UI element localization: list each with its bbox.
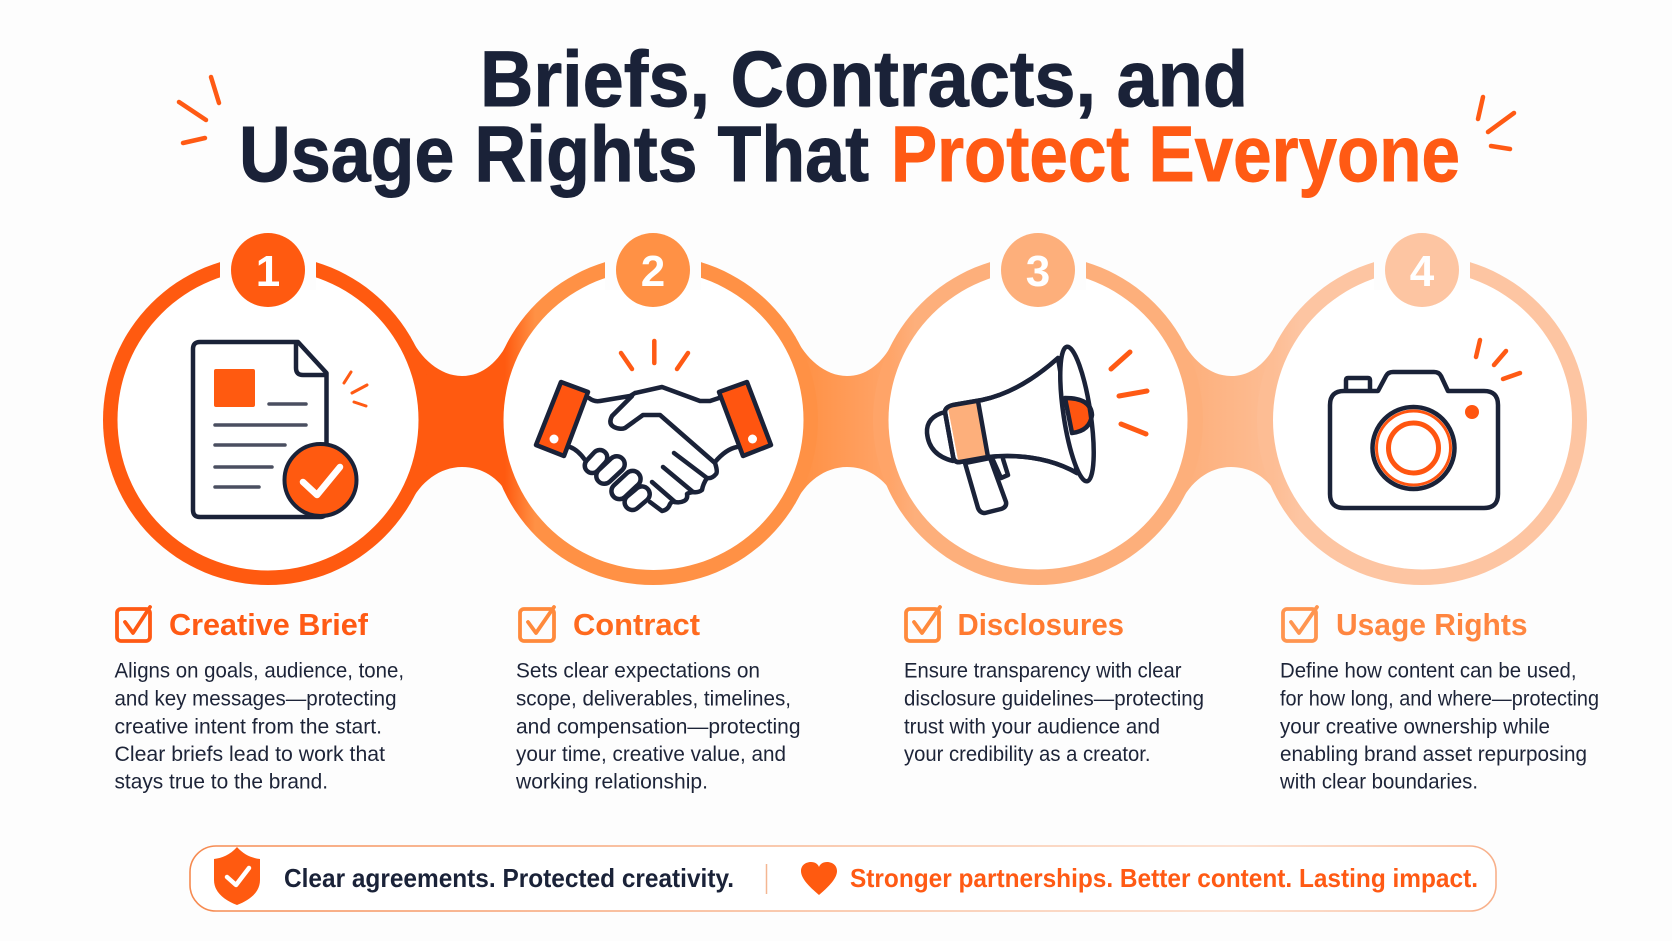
text block: creative brief: Aligns on goals, audience, tone, [114,660,404,682]
text block: disclosures: Ensure transparency with clear [904,660,1182,682]
number badge 1: 1 [256,247,280,296]
text: clear agreements: Clear agreements. Protected creativity. [284,863,734,893]
text block: creative brief: stays true to the brand. [114,770,328,794]
text block: creative brief: creative intent from the start. [114,716,382,738]
icon: megaphone [927,345,1147,513]
panel: step 3 disclosures [873,233,1204,766]
text block: creative brief: and key messages—protecting [114,688,396,710]
ring 4 [1257,240,1587,585]
ring 2 [488,240,818,585]
icon: heart [801,862,837,895]
text block: contract: Sets clear expectations on [516,660,760,682]
text block: contract: and compensation—protecting [516,716,800,738]
number badge 4: 4 [1410,247,1435,296]
text block: contract: scope, deliverables, timelines, [516,688,791,710]
text block: usage rights [1279,660,1599,794]
heading: usage rights: Usage Rights [1336,607,1528,642]
title: Briefs, Contracts, and [480,34,1248,123]
title [239,34,1460,198]
ring 3 [873,240,1203,585]
text block: contract [515,660,800,794]
number badge 2 [616,233,690,307]
heading: creative brief: Creative Brief [169,607,369,642]
number badge 1 [231,233,305,307]
text block: usage rights: enabling brand asset repurposing [1280,743,1587,766]
icon: shield [214,847,260,905]
icon: left title sparks [179,77,219,143]
title: Usage Rights That [239,109,869,198]
icon: handshake [536,341,771,513]
callout: bottom banner [190,846,1496,911]
text block: contract: working relationship. [515,770,708,794]
text block: contract: your time, creative value, and [516,743,786,766]
number badge 3: 3 [1026,247,1050,296]
icon: document with check [193,342,367,517]
text block: disclosures: your credibility as a creator. [904,743,1150,766]
connectors between circles [410,336,1281,504]
divider [766,864,768,894]
panel: step 4 usage rights [1257,233,1599,794]
text block: creative brief: Clear briefs lead to work that [114,743,385,766]
number badge 4 [1385,233,1459,307]
panel: step 1 creative brief [103,233,433,794]
text block: usage rights: your creative ownership while [1280,716,1550,738]
number badge 3 [1001,233,1075,307]
text block: usage rights: Define how content can be used, [1280,660,1576,682]
text block: creative brief [114,660,404,794]
text block: disclosures [904,660,1204,766]
heading: disclosures: Disclosures [958,607,1124,642]
banner outline [190,846,1496,911]
ring 1 [103,240,433,585]
text: stronger partnerships: Stronger partnerships. Better content. Lasting impact. [850,863,1478,893]
icon: right title sparks [1478,97,1514,149]
text block: disclosures: disclosure guidelines—protecting [904,688,1204,710]
title: Protect Everyone [891,109,1460,198]
number badge 2: 2 [641,247,665,296]
text block: disclosures: trust with your audience and [904,716,1160,738]
text block: usage rights: with clear boundaries. [1279,770,1478,794]
text block: usage rights: for how long, and where—protecting [1280,688,1599,710]
panel: step 2 contract [488,233,818,794]
heading: contract: Contract [573,607,700,642]
icon: camera [1330,340,1520,508]
